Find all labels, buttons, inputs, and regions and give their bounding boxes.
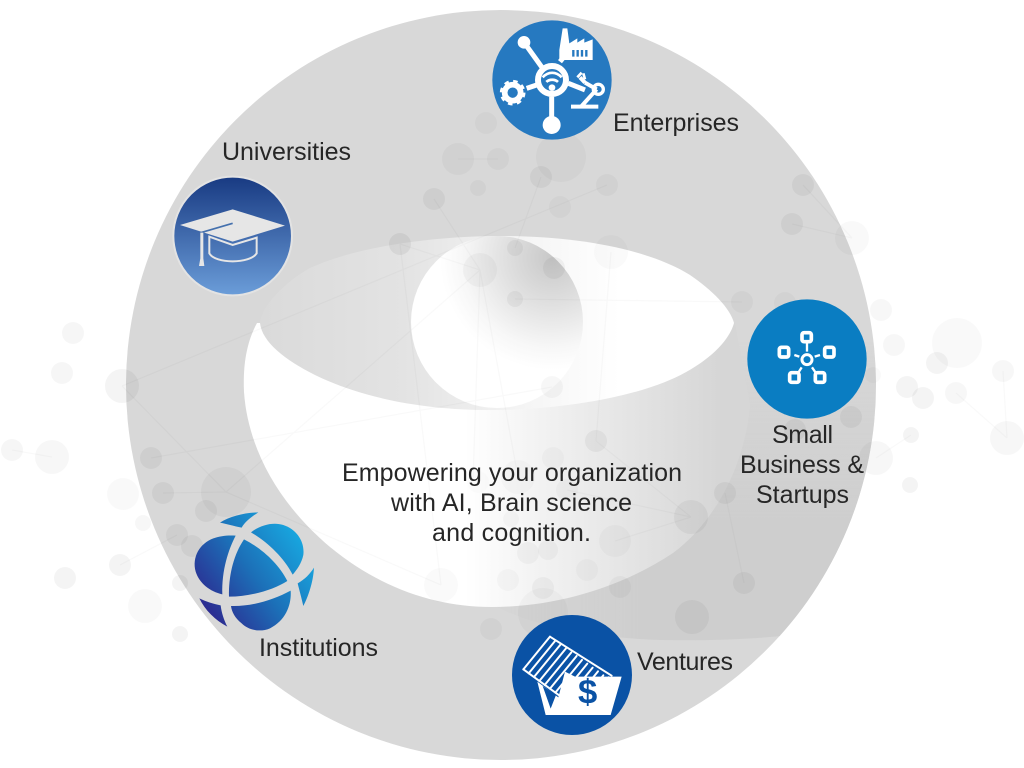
ring shadow under bowl — [612, 437, 872, 640]
label: Ventures: Ventures — [637, 648, 733, 676]
iris circle — [411, 236, 583, 408]
eye shape — [260, 236, 734, 410]
icon: universities — [173, 177, 292, 295]
icon: ventures: $ — [578, 673, 597, 711]
central text: with AI, Brain science — [390, 489, 632, 517]
icon: small business — [747, 299, 867, 419]
label: Enterprises: Enterprises — [613, 109, 739, 137]
network lines — [12, 159, 1007, 585]
icon: institutions globe — [195, 512, 314, 630]
central text: Empowering your organization — [342, 459, 682, 487]
label: small business and startups: Business & — [740, 451, 864, 479]
label: small business and startups — [740, 421, 864, 509]
icon: enterprises — [492, 20, 612, 140]
label: Institutions: Institutions — [259, 634, 378, 662]
network dots — [1, 112, 1024, 642]
ring background — [126, 10, 876, 760]
central text: and cognition. — [432, 519, 591, 547]
bowl: white inner shape — [244, 323, 750, 607]
icon: ventures — [512, 615, 632, 735]
label: small business and startups: Startups — [756, 481, 849, 509]
label: small business and startups: Small — [772, 421, 833, 449]
central text — [342, 459, 682, 547]
label: Universities: Universities — [222, 138, 351, 166]
